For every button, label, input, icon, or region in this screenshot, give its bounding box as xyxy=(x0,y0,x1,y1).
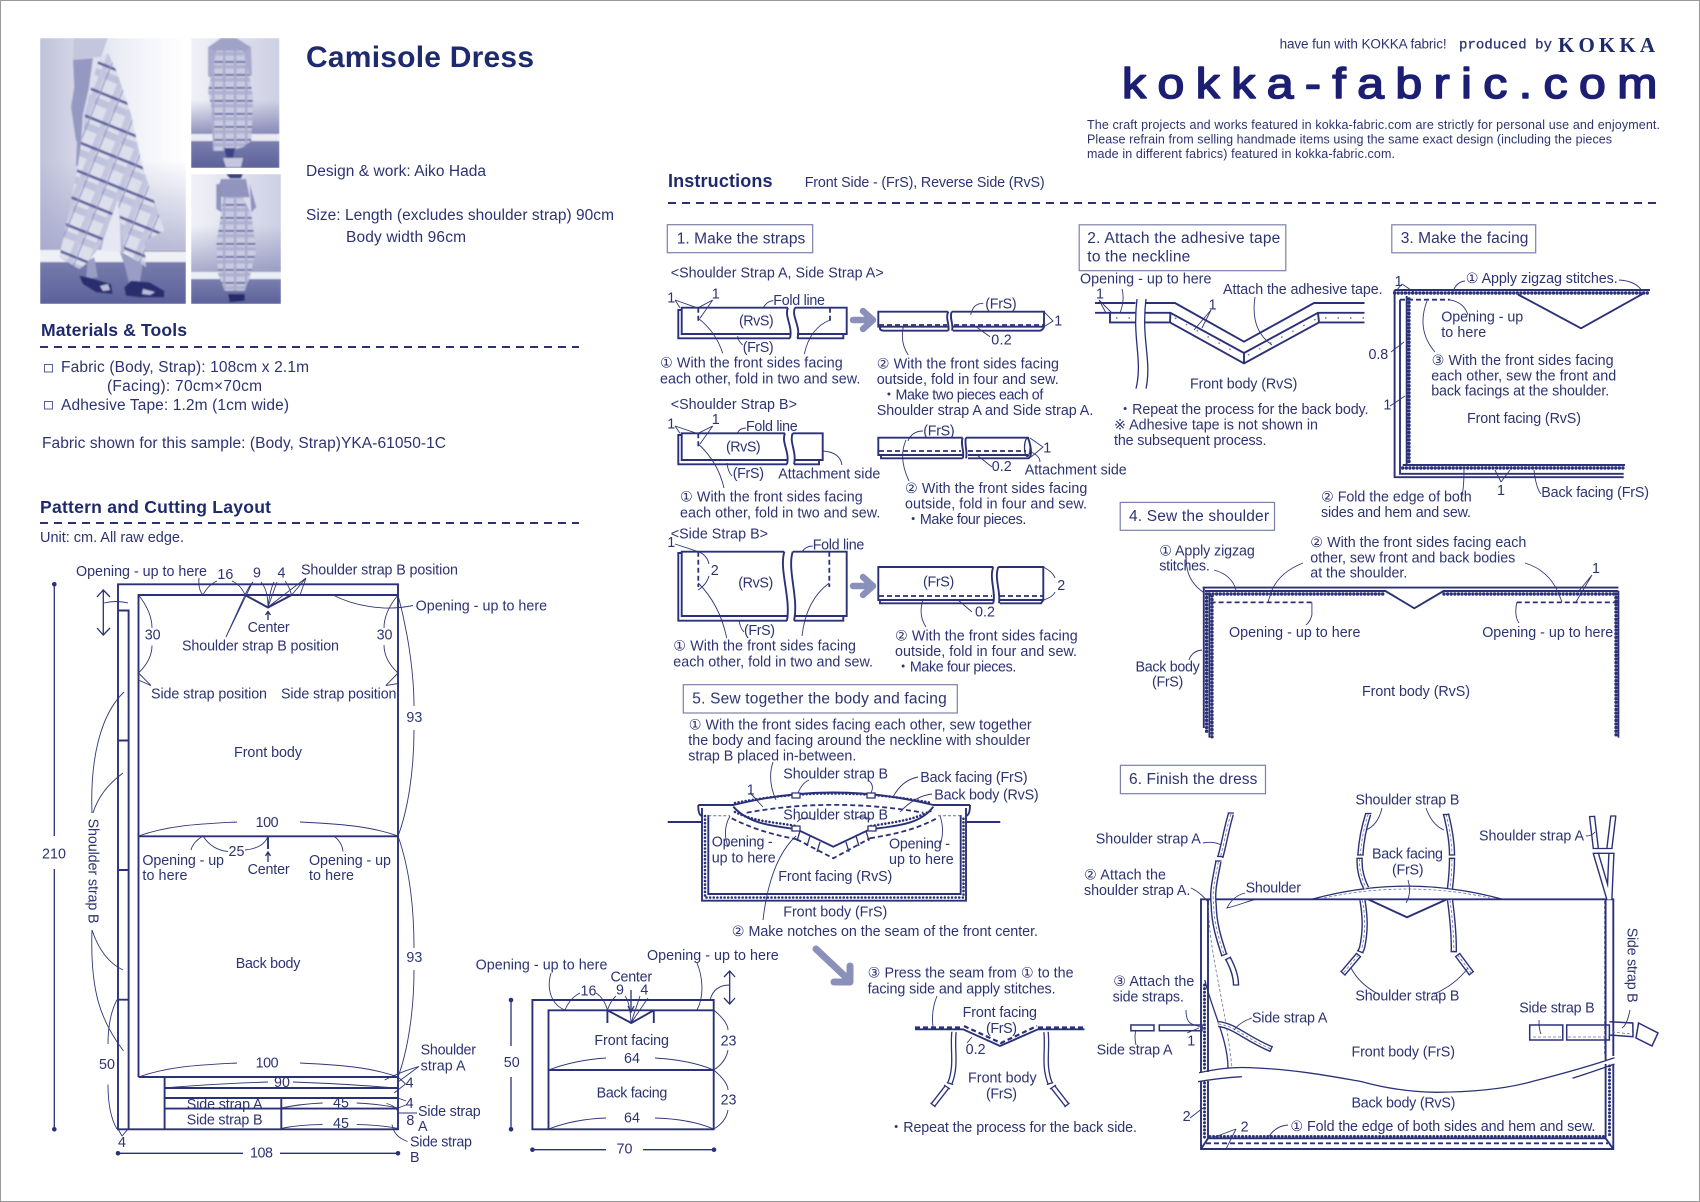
diagram: neckline seam: up to here xyxy=(712,850,776,866)
diagram: side strap folded in four: (FrS) xyxy=(923,575,954,591)
diagram: side strap folded in four: ・Make four pieces. xyxy=(896,660,1016,676)
diagram: strap B folded in four: outside, fold in four and sew. xyxy=(905,496,1087,512)
facing labels: Front facing xyxy=(594,1033,669,1049)
diagram: side strap B: <Side Strap B> xyxy=(671,526,768,542)
materials list: Fabric shown for this sample: (Body, Strap)YKA-61050-1C xyxy=(42,435,446,452)
materials list: Fabric (Body, Strap): 108cm x 2.1m xyxy=(61,359,309,376)
diagram: neckline seam: Shoulder strap B xyxy=(783,807,888,823)
cutting dimension lines xyxy=(52,582,400,1156)
step 6 labels: Shoulder strap A xyxy=(1096,831,1201,847)
step 3 heading: 3. Make the facing xyxy=(1401,230,1528,247)
cutting labels: Opening - up xyxy=(142,853,224,869)
diagram: facing with zigzag stitches: sides and hem and sew. xyxy=(1321,505,1471,521)
cutting labels: 4 xyxy=(406,1096,414,1112)
diagram: strap folded in four xyxy=(877,296,1093,419)
cutting labels: Back body xyxy=(236,956,301,972)
diagram: shoulder strap B: Fold line xyxy=(746,419,798,435)
step 6 labels: shoulder strap A. xyxy=(1084,883,1190,899)
diagram: neckline seam: 1 xyxy=(747,782,755,798)
diagram: side strap B: ① With the front sides facing xyxy=(673,639,856,655)
cutting labels: Center xyxy=(248,620,290,636)
credits and size: Design & work: Aiko Hada xyxy=(306,163,486,180)
diagram: strap B folded in four xyxy=(878,424,1127,528)
diagram: neckline seam: Opening - xyxy=(889,836,950,852)
diagram: strap folded in four: ・Make two pieces each of xyxy=(882,387,1043,403)
diagram: facing with zigzag stitches: Front facing (RvS) xyxy=(1467,411,1581,427)
diagram: neckline seam: ② Make notches on the seam of the front center. xyxy=(732,924,1038,940)
usage notice: made in different fabrics) featured in kokka-fabric.com. xyxy=(1087,147,1395,161)
diagram: strap folded in four: ② With the front sides facing xyxy=(877,356,1059,372)
diagram: front and back bodies sewn at shoulder: at the shoulder. xyxy=(1310,566,1407,582)
diagram: neckline seam xyxy=(668,762,1039,940)
step 6 heading: 6. Finish the dress xyxy=(1129,771,1258,788)
credits and size: Body width 96cm xyxy=(346,229,466,246)
step 1 heading: 1. Make the straps xyxy=(677,230,806,247)
title: Camisole Dress xyxy=(306,41,534,74)
facing leader curves xyxy=(548,963,730,1129)
diagram: facing with zigzag stitches: 1 xyxy=(1383,397,1391,413)
diagram: side strap B: (FrS) xyxy=(744,623,775,639)
step 6 labels xyxy=(1084,792,1640,1136)
cutting labels: strap A xyxy=(421,1059,466,1075)
diagram: shoulder strap A, side strap A: (FrS) xyxy=(743,340,774,356)
cutting labels: A xyxy=(418,1119,428,1135)
diagram: shoulder strap B: each other, fold in two and sew. xyxy=(680,505,880,521)
facing labels: 4 xyxy=(640,982,648,998)
facing outline xyxy=(532,1000,714,1129)
cutting labels: 16 xyxy=(217,567,233,583)
cutting labels: 45 xyxy=(333,1116,349,1132)
diagram: facing with zigzag stitches: Opening - up xyxy=(1441,309,1523,325)
diagram: strap B folded in four: Attachment side xyxy=(1025,462,1127,478)
heading: instructions: Instructions xyxy=(668,171,772,191)
straps xyxy=(1131,813,1658,1052)
arrow xyxy=(853,577,873,595)
diagram: neckline seam: Front facing (RvS) xyxy=(778,869,892,885)
diagram: shoulder strap B xyxy=(667,397,880,521)
step 5 instruction: the body and facing around the neckline with shoulder xyxy=(688,733,1031,749)
diagram: front and back bodies sewn at shoulder: Back body xyxy=(1136,659,1201,675)
credits and size xyxy=(306,163,614,246)
cutting labels: 90 xyxy=(274,1075,290,1091)
cutting labels: 100 xyxy=(256,815,279,831)
panel: step 1 make the straps xyxy=(660,225,1127,676)
step 6 labels: (FrS) xyxy=(1392,862,1424,878)
credits and size: Size: Length (excludes shoulder strap) 90cm xyxy=(306,207,614,224)
step 6 labels: 1 xyxy=(1187,1033,1195,1049)
materials list: (Facing): 70cm×70cm xyxy=(107,378,262,395)
facing labels: 23 xyxy=(721,1093,737,1109)
diagram: shoulder strap B: 1 xyxy=(667,416,675,432)
cutting labels: 30 xyxy=(145,628,161,644)
step 6 labels: ③ Attach the xyxy=(1113,974,1194,990)
diagram: side strap folded in four xyxy=(878,567,1078,676)
cutting labels: 93 xyxy=(406,950,422,966)
panel: step 6 finish the dress xyxy=(1084,765,1658,1149)
facing labels: Opening - up to here xyxy=(647,948,779,964)
cutting labels: Center xyxy=(248,862,290,878)
step 6 labels: ② Attach the xyxy=(1084,867,1166,883)
step 2 notes xyxy=(1114,402,1368,449)
step 6 labels: Front body (FrS) xyxy=(1352,1045,1455,1061)
diagram: front and back bodies sewn at shoulder: ① Apply zigzag xyxy=(1159,544,1255,560)
step 6 labels: Back body (RvS) xyxy=(1352,1096,1455,1112)
diagram: shoulder strap A, side strap A: 1 xyxy=(667,291,675,307)
step 6 labels: 2 xyxy=(1241,1120,1249,1136)
diagram: shoulder strap B: (RvS) xyxy=(726,440,761,456)
diagram: press seam and stitch: Front facing xyxy=(963,1005,1037,1021)
step 2 notes: ※ Adhesive tape is not shown in xyxy=(1114,418,1318,434)
diagram: side strap B: 1 xyxy=(667,535,675,551)
cutting labels xyxy=(42,563,547,1166)
cutting labels: 45 xyxy=(333,1096,349,1112)
step 5 heading xyxy=(683,685,957,713)
diagram: strap B folded in four: (FrS) xyxy=(923,424,955,440)
step 5 heading: 5. Sew together the body and facing xyxy=(692,690,947,707)
diagram: adhesive tape on neckline: 1 xyxy=(1096,286,1104,302)
step 2 notes: ・Repeat the process for the back body. xyxy=(1118,402,1368,418)
step 6 labels: Shoulder strap A xyxy=(1479,828,1584,844)
diagram: shoulder strap A, side strap A: Fold line xyxy=(773,293,825,309)
diagram: strap folded in four: 0.2 xyxy=(991,332,1012,348)
diagram: facing with zigzag stitches: ③ With the front sides facing xyxy=(1432,353,1614,369)
cutting labels: 25 xyxy=(228,844,244,860)
step 6 labels: 2 xyxy=(1183,1109,1191,1125)
step 5 instruction xyxy=(688,717,1032,765)
cutting labels: Opening - up xyxy=(309,853,391,869)
diagram: front and back bodies sewn at shoulder xyxy=(1136,535,1618,738)
panel: step 2 attach the adhesive tape xyxy=(1079,225,1383,449)
cutting labels: Shoulder strap B position xyxy=(301,563,458,579)
facing labels: Back facing xyxy=(597,1085,667,1101)
arrow xyxy=(816,949,850,982)
facing labels: 50 xyxy=(504,1055,520,1071)
cutting outline xyxy=(118,584,398,1129)
facing labels: 64 xyxy=(624,1051,640,1067)
cutting labels: Side strap position xyxy=(151,687,267,703)
diagram: facing with zigzag stitches: back facings at the shoulder. xyxy=(1431,384,1609,400)
diagram: neckline seam: Back body (RvS) xyxy=(934,787,1039,803)
chart: body fabric cutting layout xyxy=(42,563,547,1166)
step 5 instruction: ① With the front sides facing each other, sew together xyxy=(689,717,1032,733)
diagram: press seam and stitch: facing side and apply stitches. xyxy=(868,981,1056,997)
cutting labels: Side strap A xyxy=(187,1097,263,1113)
cutting labels: B xyxy=(410,1150,420,1166)
diagram: facing with zigzag stitches: each other, sew the front and xyxy=(1431,368,1616,384)
step 3 heading xyxy=(1392,225,1536,253)
cutting labels: 30 xyxy=(377,628,393,644)
cutting labels: Side strap xyxy=(410,1135,472,1151)
diagram: front and back bodies sewn at shoulder: Opening - up to here xyxy=(1229,625,1360,641)
diagram: side strap folded in four: 2 xyxy=(1057,578,1065,594)
facing labels: 70 xyxy=(616,1142,632,1158)
step 6 labels: Side strap B xyxy=(1624,928,1640,1003)
step 6 labels: Shoulder strap B xyxy=(1355,989,1459,1005)
diagram: strap folded in four: outside, fold in four and sew. xyxy=(877,372,1059,388)
diagram: strap B folded in four: 1 xyxy=(1043,440,1051,456)
diagram: facing with zigzag stitches: 0.8 xyxy=(1368,347,1388,363)
step 1 heading xyxy=(667,225,813,253)
diagram: front and back bodies sewn at shoulder: (FrS) xyxy=(1152,675,1183,691)
materials list: Adhesive Tape: 1.2m (1cm wide) xyxy=(61,397,289,414)
heading: materials and tools: Materials & Tools xyxy=(41,320,187,340)
cutting labels: 9 xyxy=(253,566,261,582)
diagram: shoulder strap B: <Shoulder Strap B> xyxy=(671,397,797,413)
diagram: front and back bodies sewn at shoulder: Opening - up to here xyxy=(1482,625,1613,641)
diagram: shoulder strap A, side strap A: ① With the front sides facing xyxy=(660,356,843,372)
diagram: strap folded in four: (FrS) xyxy=(985,296,1017,312)
cutting labels: Shoulder xyxy=(421,1043,476,1059)
step 6 labels: Back facing xyxy=(1372,847,1443,863)
step 6 labels: Side strap B xyxy=(1519,1001,1595,1017)
diagram: side strap B: Fold line xyxy=(813,538,864,554)
cutting labels: Side strap position xyxy=(281,687,397,703)
diagram: side strap B xyxy=(667,526,873,670)
facing labels: Opening - up to here xyxy=(476,957,607,973)
step 6 leader curves xyxy=(1135,808,1630,1149)
diagram: finished dress body xyxy=(1084,792,1658,1149)
diagram: side strap folded in four: ② With the front sides facing xyxy=(895,628,1078,644)
step 2 heading: to the neckline xyxy=(1087,249,1190,266)
diagram: press seam and stitch: Front body xyxy=(968,1070,1038,1086)
diagram: press seam and stitch: (FrS) xyxy=(986,1086,1017,1102)
materials list xyxy=(42,359,446,452)
cutting labels: Side strap xyxy=(418,1104,481,1120)
arrow xyxy=(853,311,873,329)
diagram: facing with zigzag stitches: Back facing (FrS) xyxy=(1541,485,1649,501)
photo: front view of dress xyxy=(191,38,280,168)
heading: pattern and cutting layout: Pattern and Cutting Layout xyxy=(40,497,271,517)
diagram: strap B folded in four: 0.2 xyxy=(992,459,1012,475)
cutting labels: 4 xyxy=(278,566,286,582)
diagram: shoulder strap A, side strap A: 1 xyxy=(712,286,720,302)
diagram: press seam and stitch: (FrS) xyxy=(986,1021,1017,1037)
facing dimension lines xyxy=(509,971,735,1152)
diagram: adhesive tape on neckline: Front body (RvS) xyxy=(1190,376,1297,392)
cutting leader curves xyxy=(92,578,419,1142)
diagram: neckline seam: Opening - xyxy=(712,835,773,851)
step 6 heading xyxy=(1120,765,1266,794)
diagram: side strap B: each other, fold in two and sew. xyxy=(673,654,873,670)
step 6 labels: Side strap A xyxy=(1097,1043,1173,1059)
step 6 labels: side straps. xyxy=(1113,990,1184,1006)
diagram: strap folded in four: 1 xyxy=(1054,314,1062,330)
diagram: shoulder strap A, side strap A: each other, fold in two and sew. xyxy=(660,371,860,387)
diagram: shoulder strap B: Attachment side xyxy=(778,467,880,483)
diagram: shoulder strap B: (FrS) xyxy=(733,466,764,482)
cutting labels: to here xyxy=(309,868,354,884)
diagram: adhesive tape on neckline xyxy=(1080,271,1383,392)
cutting labels: 210 xyxy=(42,846,66,862)
cutting labels: 93 xyxy=(406,710,422,726)
diagram: facing with zigzag stitches: 1 xyxy=(1395,274,1403,290)
diagram: neckline seam: up to here xyxy=(889,852,954,868)
step 6 labels: Side strap A xyxy=(1252,1011,1328,1027)
diagram: facing with zigzag stitches: ② Fold the edge of both xyxy=(1321,490,1472,506)
heading: instructions xyxy=(668,171,1657,203)
diagram: press seam and stitch: 0.2 xyxy=(966,1042,986,1058)
heading: pattern and cutting layout xyxy=(40,497,579,546)
diagram: shoulder strap A, side strap A: (RvS) xyxy=(739,314,774,330)
diagram: side strap B: 2 xyxy=(711,563,719,579)
brand tagline xyxy=(1280,33,1656,57)
usage notice: Please refrain from selling handmade items using the same exact design (including the pieces xyxy=(1087,132,1612,146)
step 2 heading: 2. Attach the adhesive tape xyxy=(1087,230,1280,247)
step 6 labels: ① Fold the edge of both sides and hem and sew. xyxy=(1290,1119,1595,1135)
cutting labels: Front body xyxy=(234,745,303,761)
brand tagline: have fun with KOKKA fabric! xyxy=(1280,37,1447,52)
panel: step 5 sew together the body and facing xyxy=(668,685,1137,1136)
diagram: front and back bodies sewn at shoulder: stitches. xyxy=(1159,559,1210,575)
diagram: shoulder strap A, side strap A: <Shoulder Strap A, Side Strap A> xyxy=(671,266,884,282)
heading: instructions: Front Side - (FrS), Reverse Side (RvS) xyxy=(805,175,1045,191)
facing labels: Center xyxy=(610,969,652,985)
cutting labels: to here xyxy=(142,868,187,884)
diagram: neckline seam: Shoulder strap B xyxy=(783,766,888,782)
diagram: facing with zigzag stitches: 1 xyxy=(1497,483,1505,499)
diagram: neckline seam: Back facing (FrS) xyxy=(920,770,1028,786)
panel: step 4 sew the shoulder xyxy=(1120,502,1618,738)
diagram: shoulder strap A, side strap A xyxy=(660,266,884,387)
diagram: shoulder strap B: ① With the front sides facing xyxy=(680,490,863,506)
step 6 labels: Shoulder xyxy=(1246,881,1301,897)
diagram: adhesive tape on neckline: 1 xyxy=(1209,297,1217,313)
step 5 note: ・Repeat the process for the back side. xyxy=(889,1120,1137,1136)
cutting labels: 4 xyxy=(406,1076,414,1092)
cutting labels: Shoulder strap B position xyxy=(182,639,339,655)
diagram: front and back bodies sewn at shoulder: ② With the front sides facing each xyxy=(1310,535,1526,551)
cutting labels: Shoulder strap B xyxy=(84,819,100,924)
diagram: neckline seam: Front body (FrS) xyxy=(783,905,887,921)
cutting labels: 8 xyxy=(406,1113,414,1129)
diagram: facing with zigzag stitches xyxy=(1321,271,1651,521)
cutting labels: 100 xyxy=(256,1056,279,1072)
diagram: strap B folded in four: ② With the front sides facing xyxy=(905,481,1087,497)
cutting labels: 50 xyxy=(99,1057,115,1073)
diagram: shoulder strap B: 1 xyxy=(712,412,720,428)
diagram: front and back bodies sewn at shoulder: other, sew front and back bodies xyxy=(1310,550,1515,566)
cutting labels: Opening - up to here xyxy=(416,598,547,614)
panel: step 3 make the facing xyxy=(1321,225,1651,521)
diagram: facing with zigzag stitches: ① Apply zigzag stitches. xyxy=(1466,271,1618,287)
step 2 heading xyxy=(1079,225,1286,271)
cutting labels: 108 xyxy=(250,1146,273,1162)
step 5 instruction: strap B placed in-between. xyxy=(688,749,856,765)
step 4 heading: 4. Sew the shoulder xyxy=(1129,508,1269,525)
cutting labels: Side strap B xyxy=(187,1113,262,1129)
diagram: side strap B: (RvS) xyxy=(738,576,773,592)
diagram: facing with zigzag stitches: to here xyxy=(1441,325,1486,341)
photo: back view of dress xyxy=(191,174,281,304)
brand tagline: KOKKA xyxy=(1558,33,1656,57)
step 2 notes: the subsequent process. xyxy=(1114,433,1266,449)
diagram: front and back bodies sewn at shoulder: 1 xyxy=(1592,561,1600,577)
logo: kokka-fabric.com: kokka-fabric.com xyxy=(1122,59,1657,107)
facing labels: 9 xyxy=(616,982,624,998)
chart: facing fabric cutting layout xyxy=(476,948,779,1158)
diagram: side strap folded in four: outside, fold in four and sew. xyxy=(895,644,1077,660)
heading: pattern and cutting layout: Unit: cm. All raw edge. xyxy=(40,530,184,546)
diagram: strap B folded in four: ・Make four pieces. xyxy=(906,512,1026,528)
usage notice xyxy=(1087,118,1660,161)
step 4 heading xyxy=(1120,502,1274,530)
cutting labels: 4 xyxy=(118,1135,126,1151)
diagram: press seam and stitch: ③ Press the seam from ① to the xyxy=(868,966,1074,982)
diagram: adhesive tape on neckline: Attach the adhesive tape. xyxy=(1223,282,1383,298)
facing labels xyxy=(476,948,779,1158)
photo: side view of dress xyxy=(40,38,186,304)
facing labels: 64 xyxy=(624,1110,640,1126)
facing labels: 16 xyxy=(580,984,596,1000)
brand tagline: produced by xyxy=(1459,38,1552,54)
cutting labels: Opening - up to here xyxy=(76,564,207,580)
diagram: front and back bodies sewn at shoulder: Front body (RvS) xyxy=(1362,684,1470,700)
usage notice: The craft projects and works featured in kokka-fabric.com are strictly for personal use and enjoyment. xyxy=(1087,118,1660,132)
diagram: press seam and stitch xyxy=(868,966,1084,1107)
step 6 labels: Shoulder strap B xyxy=(1355,792,1459,808)
diagram: adhesive tape on neckline: Opening - up to here xyxy=(1080,271,1211,287)
diagram: side strap folded in four: 0.2 xyxy=(975,605,995,621)
facing labels: 23 xyxy=(721,1033,737,1049)
diagram: strap folded in four: Shoulder strap A and Side strap A. xyxy=(877,403,1093,419)
